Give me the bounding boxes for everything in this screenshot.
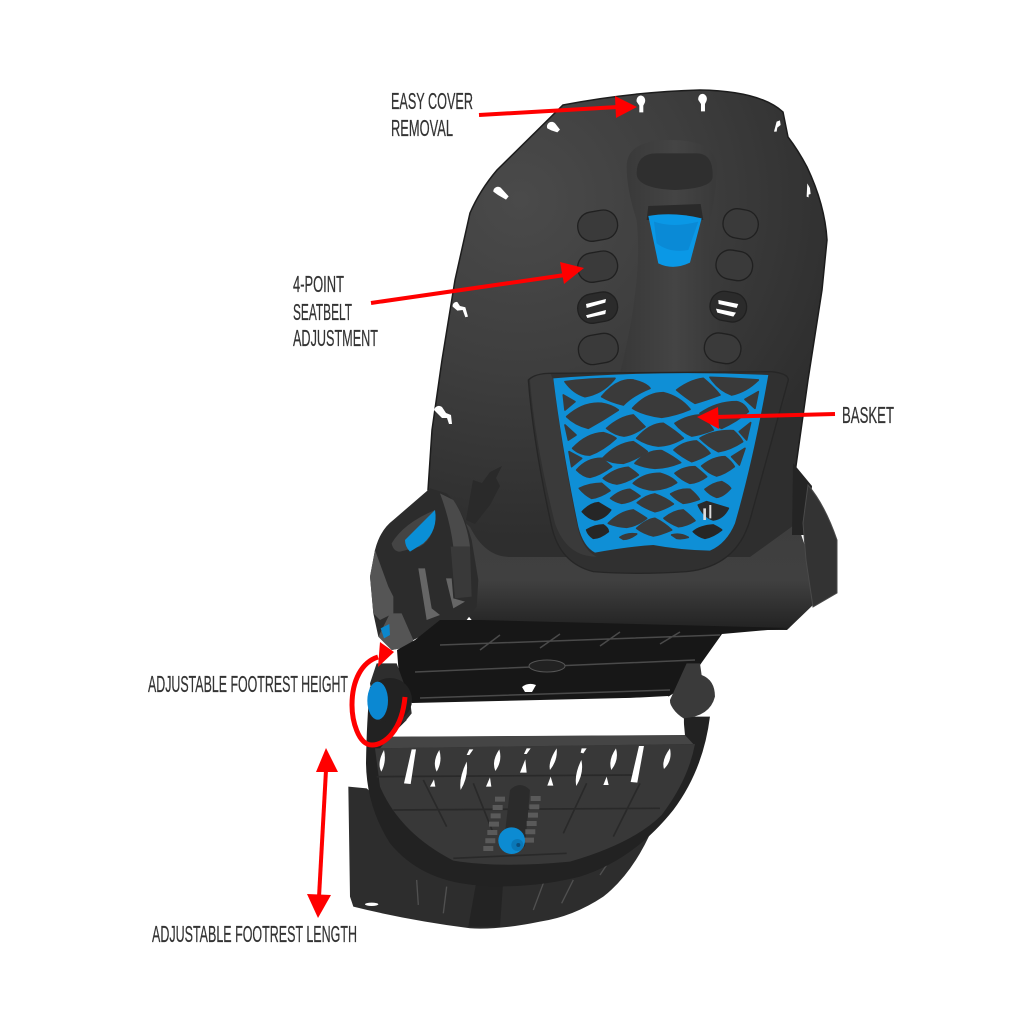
underside ribs bbox=[415, 632, 720, 698]
seat product illustration bbox=[348, 90, 837, 929]
footrest length rail bbox=[503, 785, 530, 847]
label: 4-point seatbelt adjustment bbox=[293, 271, 378, 351]
label: easy cover removal: REMOVAL bbox=[391, 115, 453, 141]
arrow: basket bbox=[697, 407, 835, 429]
icon: blue knob upper bbox=[381, 624, 390, 638]
label: easy cover removal bbox=[391, 88, 473, 141]
net openings bbox=[563, 377, 758, 539]
footrest slots bbox=[380, 746, 671, 790]
footrest assembly bbox=[348, 663, 715, 929]
footrest white gap bbox=[390, 696, 684, 737]
seat back shell bbox=[428, 90, 827, 565]
lower keyhole bbox=[434, 406, 452, 424]
icon: blue pocket bbox=[648, 214, 702, 267]
label: easy cover removal: EASY COVER bbox=[391, 88, 473, 114]
cover keyholes bbox=[453, 94, 811, 317]
seat underside plate bbox=[397, 620, 790, 703]
underside hole bbox=[522, 684, 536, 692]
icon: blue handle bbox=[405, 510, 436, 552]
left side bracket with blue handle bbox=[370, 488, 478, 650]
footrest frame bbox=[366, 687, 710, 886]
arrow: footrest length bbox=[307, 748, 338, 918]
seatbelt slots bbox=[575, 206, 761, 367]
icon: blue adjustment knob bbox=[498, 827, 525, 854]
icon: blue dial bbox=[367, 682, 388, 720]
right side bracket bbox=[792, 463, 837, 607]
label: basket: BASKET bbox=[842, 402, 894, 428]
label: adjustable footrest length: ADJUSTABLE FOOTREST LENGTH bbox=[152, 921, 357, 947]
label: adjustable footrest height: ADJUSTABLE FOOTREST HEIGHT bbox=[148, 671, 348, 697]
footrest pivot right bbox=[670, 663, 715, 718]
seat pod base bbox=[455, 520, 813, 630]
label: 4-point seatbelt adjustment: 4-POINT bbox=[293, 271, 344, 297]
basket backing panel bbox=[528, 372, 788, 573]
central channel and headrest recess bbox=[620, 140, 730, 373]
footrest pivot left bbox=[367, 663, 412, 722]
arrow: footrest height rotation bbox=[352, 642, 405, 745]
top strap of side bbox=[466, 466, 502, 524]
arrow: easy cover removal bbox=[479, 96, 637, 118]
lower footrest extension bbox=[348, 787, 653, 929]
footrest plate bbox=[375, 744, 695, 865]
arrow: seatbelt adjustment bbox=[371, 262, 584, 303]
label: 4-point seatbelt adjustment: ADJUSTMENT bbox=[293, 325, 378, 351]
label: 4-point seatbelt adjustment: SEATBELT bbox=[293, 299, 352, 325]
